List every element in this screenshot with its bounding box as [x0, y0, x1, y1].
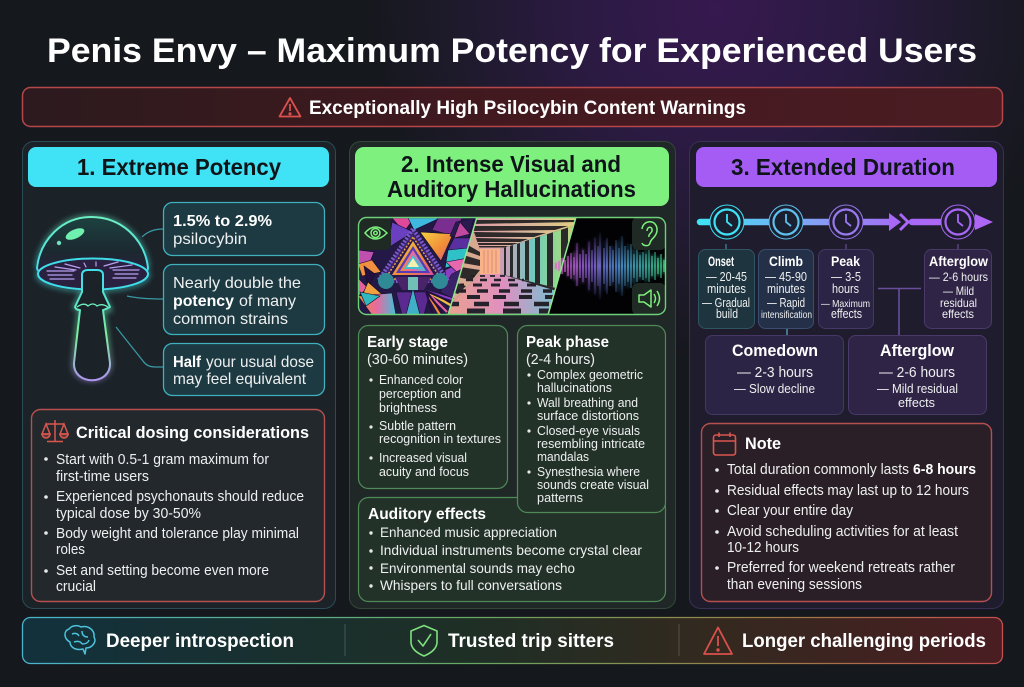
stage: comedown: Comedown	[732, 341, 818, 360]
peak phase box: Complex geometric	[537, 368, 643, 382]
stage: peak: effects	[831, 307, 862, 321]
stage: onset: — Gradual	[702, 296, 750, 310]
callout: double potency: potency	[173, 293, 234, 310]
banner heading: Exceptionally High Psilocybin Content Warnings	[309, 98, 746, 119]
callout: double potency: common strains	[173, 311, 288, 328]
psychedelic image strip	[358, 217, 666, 315]
early stage box: recognition in textures	[379, 432, 501, 446]
takeaway: challenging periods: Longer challenging periods	[742, 631, 986, 652]
icon: speaker	[639, 290, 660, 307]
dosing bullet list: Body weight and tolerance play minimal	[56, 526, 299, 542]
stage: onset: Onset	[708, 254, 734, 269]
stage: onset: minutes	[707, 282, 746, 296]
stage: afterglow large	[848, 336, 986, 414]
callout: half dose	[164, 344, 324, 396]
auditory effects box: Environmental sounds may echo	[380, 560, 575, 576]
stage: afterglow large: Afterglow	[880, 341, 955, 360]
stage: climb: minutes	[767, 282, 805, 296]
callout: psilocybin range: 1.5% to 2.9%	[173, 213, 272, 230]
fan of rays	[426, 291, 455, 315]
peak phase box: patterns	[537, 491, 583, 505]
panel 2 header: Auditory Hallucinations	[387, 176, 636, 202]
left wall	[452, 232, 480, 302]
early stage box: Increased visual	[379, 451, 467, 465]
early stage box: perception and	[379, 387, 461, 401]
stage: comedown: — 2-3 hours	[737, 365, 813, 381]
note bullet list: Total duration commonly lasts	[727, 462, 909, 478]
peak phase box: Wall breathing and	[537, 396, 638, 410]
takeaway: trip sitters: Trusted trip sitters	[448, 631, 614, 652]
icon: eye	[365, 227, 387, 239]
stage: afterglow small: effects	[942, 307, 974, 321]
note bullet list: Residual effects may last up to 12 hours	[727, 483, 969, 499]
right wall	[500, 226, 573, 288]
early stage box: Early stage	[367, 334, 448, 351]
early stage box: Subtle pattern	[379, 419, 456, 433]
icon: ear	[642, 222, 657, 246]
stage: peak: Peak	[831, 254, 860, 269]
panel 3 header: 3. Extended Duration	[731, 154, 955, 180]
top wall	[474, 218, 575, 249]
icon: warning triangle	[704, 628, 732, 654]
note bullet list: 6-8 hours	[913, 462, 976, 478]
clock: afterglow	[941, 205, 975, 239]
stage: afterglow large: — Mild residual	[877, 381, 958, 396]
dosing bullet list: Set and setting become even more	[56, 563, 269, 579]
note bullet list: Clear your entire day	[727, 503, 854, 519]
dosing bullet list: Experienced psychonauts should reduce	[56, 489, 304, 505]
peak phase box: surface distortions	[537, 409, 639, 423]
stage: afterglow small: Afterglow	[929, 254, 988, 269]
callout: double potency: Nearly double the	[173, 275, 301, 292]
dosing bullet list: roles	[56, 542, 85, 558]
note bullet list: Avoid scheduling activities for at least	[727, 524, 958, 540]
callout: psilocybin range: psilocybin	[173, 231, 247, 248]
note bullet list: than evening sessions	[727, 577, 862, 593]
panel 1 header	[28, 147, 329, 187]
icon: calendar	[714, 432, 736, 455]
timeline connectors	[726, 244, 958, 335]
callout: double potency: of many	[239, 293, 296, 310]
early stage box: acuity and focus	[379, 465, 469, 479]
stage: peak: hours	[832, 282, 859, 296]
stage: climb: intensification	[761, 310, 812, 321]
dosing bullet list: first-time users	[56, 469, 149, 485]
warning banner	[22, 88, 1002, 126]
dosing bullet list: crucial	[56, 579, 96, 595]
peak phase box: (2-4 hours)	[526, 351, 595, 368]
bottom takeaway banner	[22, 618, 1002, 664]
peak phase box	[518, 326, 666, 512]
title: Penis Envy – Maximum Potency for Experienced Users	[47, 32, 977, 70]
stage: onset: build	[716, 307, 738, 321]
peak phase box: mandalas	[537, 450, 589, 464]
panel: visual and auditory hallucinations	[350, 142, 676, 608]
note bullet list: 10-12 hours	[727, 540, 799, 556]
peak phase box: Peak phase	[526, 334, 609, 351]
auditory effects box: Whispers to full conversations	[380, 577, 562, 593]
connector lines	[116, 229, 163, 367]
peak phase box: hallucinations	[537, 381, 612, 395]
auditory effects box	[358, 498, 666, 602]
panel: extreme potency	[22, 142, 336, 608]
stage: afterglow large: effects	[898, 395, 935, 410]
early stage box: brightness	[379, 401, 437, 415]
stage: peak: — 3-5	[831, 270, 861, 284]
clock: onset	[710, 205, 744, 239]
peak phase box: sounds create visual	[537, 478, 649, 492]
dosing bullet list	[44, 452, 304, 595]
icon: warning triangle	[280, 98, 300, 116]
dosing considerations box	[32, 410, 324, 602]
peak phase box: resembling intricate	[537, 437, 645, 451]
auditory effects box: Enhanced music appreciation	[380, 524, 557, 540]
note box	[702, 424, 992, 602]
stage: afterglow large: — 2-6 hours	[879, 365, 955, 381]
tunnel art	[449, 218, 575, 314]
callout: half dose: Half	[173, 354, 202, 371]
dosing heading: Critical dosing considerations	[76, 424, 309, 442]
panel 2 header: 2. Intense Visual and	[401, 151, 621, 177]
auditory effects box: Auditory effects	[368, 506, 486, 523]
stage: onset	[698, 250, 754, 328]
note bullet list: Preferred for weekend retreats rather	[727, 560, 955, 576]
stage: comedown: — Slow decline	[734, 381, 815, 396]
clock: climb	[769, 205, 803, 239]
floor	[449, 274, 554, 314]
note bullet list	[715, 462, 976, 593]
stage: comedown	[706, 336, 844, 414]
timeline	[700, 205, 993, 239]
callout: double potency	[164, 264, 324, 334]
stage: afterglow small: residual	[940, 296, 977, 310]
icon: shield	[411, 626, 437, 656]
panel: extended duration	[690, 142, 1004, 608]
stage: climb: — Rapid	[767, 296, 805, 310]
stage: climb: — 45-90	[765, 270, 807, 284]
takeaway: introspection: Deeper introspection	[106, 631, 294, 652]
callout: half dose: your usual dose	[206, 354, 314, 371]
stage: onset: — 20-45	[706, 270, 747, 284]
icon: neon mushroom	[37, 217, 148, 380]
early stage box: (30-60 minutes)	[367, 351, 468, 368]
geometric art	[358, 217, 478, 315]
stage: afterglow small: — 2-6 hours	[929, 270, 988, 284]
vanishing glow	[480, 249, 500, 274]
auditory effects box: Individual instruments become crystal clear	[380, 542, 642, 558]
callout: half dose: may feel equivalent	[173, 371, 307, 388]
dosing bullet list: Start with 0.5-1 gram maximum for	[56, 452, 269, 468]
clock: peak	[829, 205, 863, 239]
early stage box	[358, 326, 508, 488]
peak phase box: Synesthesia where	[537, 465, 640, 479]
stage: peak	[818, 250, 874, 328]
stage: climb	[758, 250, 814, 328]
panel 2 header	[355, 147, 669, 206]
stage: climb: Climb	[769, 254, 803, 269]
sound waveform	[556, 232, 665, 300]
callout: psilocybin range	[164, 202, 324, 256]
icon: brain	[65, 626, 95, 654]
stage: afterglow small	[924, 250, 992, 328]
dosing bullet list: typical dose by 30-50%	[56, 506, 201, 522]
stage: peak: — Maximum	[821, 298, 870, 310]
note heading: Note	[745, 434, 781, 453]
stage: afterglow small: — Mild	[943, 284, 974, 298]
peak phase box: Closed-eye visuals	[537, 424, 640, 438]
icon: balance scale	[42, 420, 68, 442]
panel 3 header	[696, 147, 997, 187]
panel 1 header: 1. Extreme Potency	[77, 154, 281, 180]
early stage box: Enhanced color	[379, 373, 463, 387]
